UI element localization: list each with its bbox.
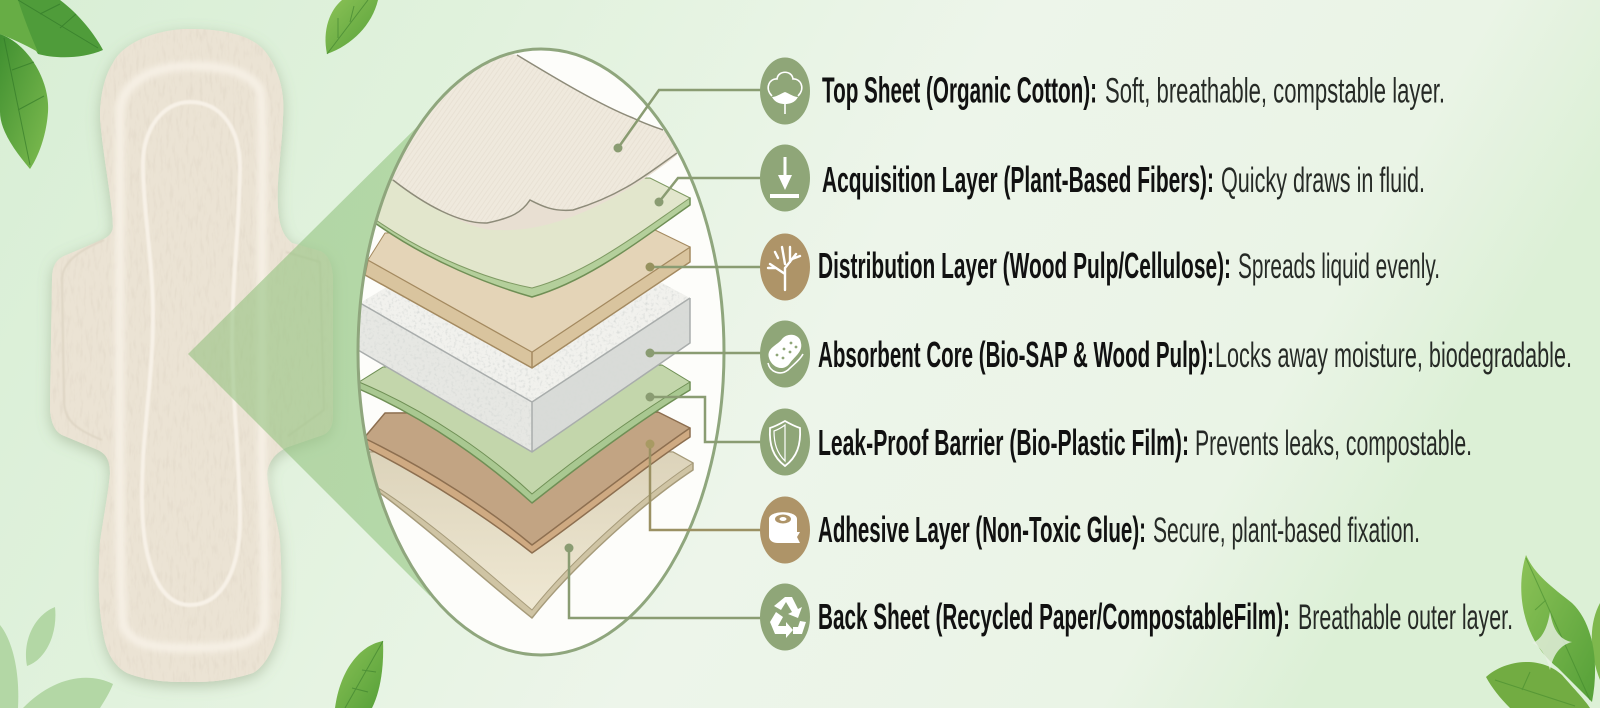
decorative leaf: top centre bbox=[325, 0, 378, 54]
layer: absorbent core bbox=[358, 283, 690, 452]
pad surface texture bbox=[50, 29, 333, 682]
row: top sheet bbox=[760, 58, 1445, 124]
pad wing creases bbox=[62, 240, 324, 440]
row: back sheet bbox=[760, 584, 1513, 650]
label: leak-proof barrier: Leak-Proof Barrier (Bio-Plastic Film): bbox=[818, 422, 1189, 463]
row: acquisition layer bbox=[760, 144, 1425, 212]
label: distribution layer: Spreads liquid evenly. bbox=[1238, 247, 1440, 286]
exploded layer stack bbox=[360, 54, 694, 619]
row: adhesive layer bbox=[760, 496, 1420, 564]
label: adhesive layer: Adhesive Layer (Non-Toxic Glue): bbox=[818, 509, 1146, 550]
icon: shield bbox=[760, 408, 810, 476]
label: adhesive layer: Secure, plant-based fixation. bbox=[1153, 511, 1420, 550]
pad outer embossed ridge bbox=[120, 66, 265, 648]
layer: distribution bbox=[365, 230, 690, 368]
label: distribution layer: Distribution Layer (Wood Pulp/Cellulose): bbox=[818, 245, 1231, 286]
icon: sponge bbox=[760, 320, 810, 388]
row: distribution layer bbox=[760, 234, 1440, 300]
row: leak-proof barrier bbox=[760, 408, 1472, 476]
decorative leaf: bottom centre bbox=[335, 641, 383, 708]
decorative leaves: bottom right with sparkle bbox=[1486, 555, 1600, 708]
icon: cotton boll bbox=[760, 58, 810, 124]
label: acquisition layer: Acquisition Layer (Plant-Based Fibers): bbox=[822, 159, 1214, 200]
icon: recycle bbox=[760, 584, 810, 650]
layer: leak-proof barrier bbox=[359, 365, 690, 503]
decorative leaves: top left bbox=[0, 0, 103, 169]
icon: bare tree bbox=[760, 234, 810, 300]
decorative leaves: bottom left, pale bbox=[0, 607, 113, 708]
magnifier ellipse bbox=[330, 40, 724, 655]
layer: top sheet bbox=[392, 54, 678, 224]
layer: adhesive bbox=[364, 412, 690, 553]
leader lines bbox=[564, 90, 762, 618]
icon: down arrow onto line bbox=[760, 144, 810, 212]
layer: acquisition bbox=[373, 178, 690, 297]
row: absorbent core bbox=[760, 320, 1572, 388]
label: absorbent core: Absorbent Core (Bio-SAP & Wood Pulp): bbox=[818, 334, 1214, 375]
label: acquisition layer: Quicky draws in fluid. bbox=[1221, 161, 1425, 200]
sanitary pad bbox=[50, 29, 333, 682]
label: top sheet: Top Sheet (Organic Cotton): bbox=[822, 70, 1097, 110]
layer: back sheet bbox=[368, 452, 693, 618]
icon: tape roll bbox=[760, 496, 810, 564]
magnifier wedge bbox=[188, 114, 430, 596]
pad inner channel bbox=[142, 102, 240, 605]
